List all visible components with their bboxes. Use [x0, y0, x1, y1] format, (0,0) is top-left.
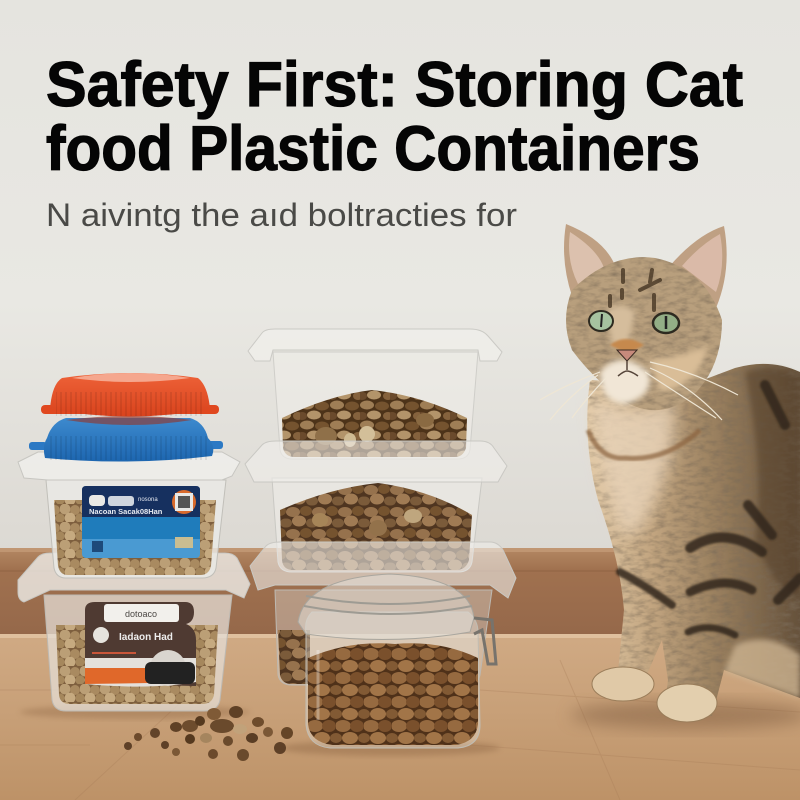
cat right eye	[653, 313, 679, 333]
label: brown food label: dotoaco	[125, 609, 157, 619]
cat neck bands	[588, 430, 700, 458]
wall background	[0, 0, 800, 550]
label: blue food label	[82, 486, 200, 558]
container: left bottom	[18, 553, 250, 711]
cat left paw	[592, 667, 654, 701]
blue lid	[29, 416, 223, 462]
cat chest	[592, 398, 674, 535]
loose kibble pile	[124, 706, 293, 761]
cat	[540, 224, 800, 722]
cat stripes	[620, 385, 800, 635]
cat haunch light	[724, 639, 800, 698]
subtitle: N aivintg the aıd boltracties for	[46, 197, 517, 233]
cat face lights	[600, 360, 650, 404]
glass jar of kibble	[298, 574, 496, 748]
cat mouth	[618, 361, 638, 376]
title: food Plastic Containers	[46, 114, 700, 184]
label: blue food label: Nacoan Sacak08Han	[89, 507, 163, 516]
label: blue food label: nosona	[138, 497, 158, 503]
cat right ear	[668, 226, 727, 308]
container: center middle	[245, 441, 507, 572]
container: center bottom	[250, 542, 516, 685]
label: brown food label	[85, 602, 196, 687]
cat back shading	[745, 368, 800, 600]
container: left top	[18, 452, 240, 578]
label: brown food label: Iadaon Had	[119, 632, 173, 643]
cat body	[587, 364, 800, 716]
cat head	[566, 257, 722, 410]
cat whiskers	[540, 362, 738, 420]
cat left ear	[564, 224, 616, 296]
cat left eye	[589, 311, 613, 331]
cat right paw	[657, 684, 717, 722]
wooden floor	[0, 634, 800, 800]
container: center top	[248, 329, 502, 459]
baseboard	[0, 548, 800, 636]
title: Safety First: Storing Cat	[46, 50, 743, 120]
cat nose	[617, 350, 637, 361]
cat forehead stripes	[610, 270, 660, 310]
red lid	[41, 373, 219, 416]
